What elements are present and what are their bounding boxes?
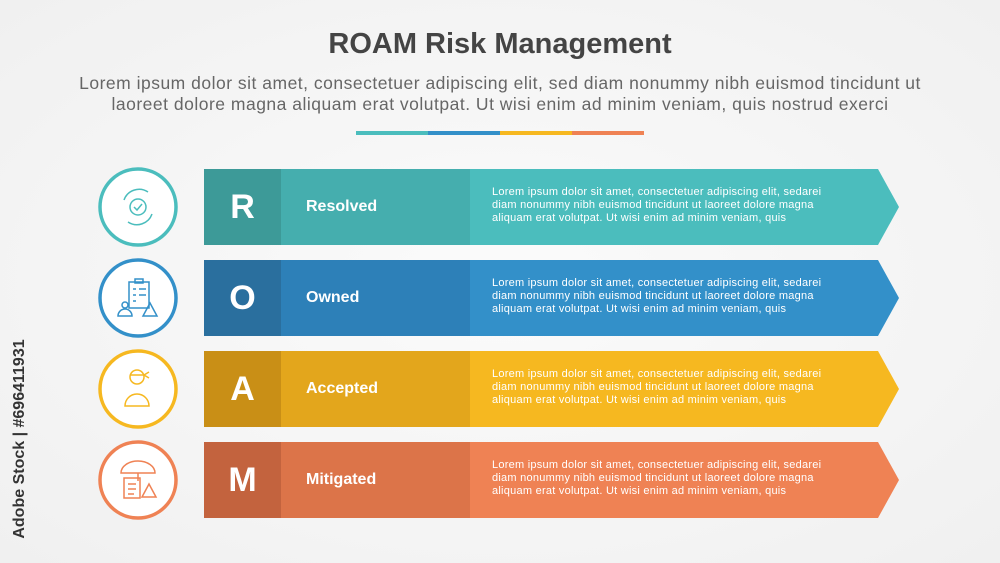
row: Accepted: Lorem ipsum dolor sit amet, consectetuer adipiscing elit, sedarei [492,368,821,380]
row: Accepted: diam nonummy nibh euismod tincidunt ut laoreet dolore magna [492,381,814,393]
row: Owned: O [229,279,256,317]
row: Resolved: Resolved [306,198,377,215]
title: ROAM Risk Management [328,28,672,60]
arrow: O [204,260,899,336]
icon: mitigated [100,442,176,518]
icon: owned [100,260,176,336]
row: Mitigated: aliquam erat volutpat. Ut wisi enim ad minim veniam, quis [492,485,786,497]
arrow: R [204,169,899,245]
row: Accepted: A [230,370,255,408]
row: Resolved: R [230,188,255,226]
subtitle: laoreet dolore magna aliquam erat volutpat. Ut wisi enim ad minim veniam, quis nostrud exerci [112,94,888,114]
row: Mitigated: Lorem ipsum dolor sit amet, consectetuer adipiscing elit, sedarei [492,459,821,471]
watermark id: Adobe Stock | #696411931 [11,339,28,539]
row: Accepted [230,368,821,408]
row: Owned: Lorem ipsum dolor sit amet, consectetuer adipiscing elit, sedarei [492,277,821,289]
row: Owned: diam nonummy nibh euismod tincidunt ut laoreet dolore magna [492,290,814,302]
row: Resolved: aliquam erat volutpat. Ut wisi enim ad minim veniam, quis [492,212,786,224]
arrow: M [204,442,899,518]
row: Mitigated: M [228,461,257,499]
row: Owned: Owned [306,289,359,306]
subtitle: Lorem ipsum dolor sit amet, consectetuer adipiscing elit, sed diam nonummy nibh euismod tincidunt ut [79,73,921,93]
row: Accepted: Accepted [306,380,378,397]
row: Resolved [230,186,821,226]
row: Mitigated: diam nonummy nibh euismod tincidunt ut laoreet dolore magna [492,472,814,484]
row: Resolved: diam nonummy nibh euismod tincidunt ut laoreet dolore magna [492,199,814,211]
row: Owned: aliquam erat volutpat. Ut wisi enim ad minim veniam, quis [492,303,786,315]
row: Mitigated [228,459,821,499]
row: Resolved: Lorem ipsum dolor sit amet, consectetuer adipiscing elit, sedarei [492,186,821,198]
arrow: A [204,351,899,427]
icon: resolved [100,169,176,245]
row: Owned [229,277,821,317]
icon: accepted [100,351,176,427]
color divider [356,131,644,135]
row: Accepted: aliquam erat volutpat. Ut wisi enim ad minim veniam, quis [492,394,786,406]
subtitle [79,73,921,114]
row: Mitigated: Mitigated [306,471,376,488]
